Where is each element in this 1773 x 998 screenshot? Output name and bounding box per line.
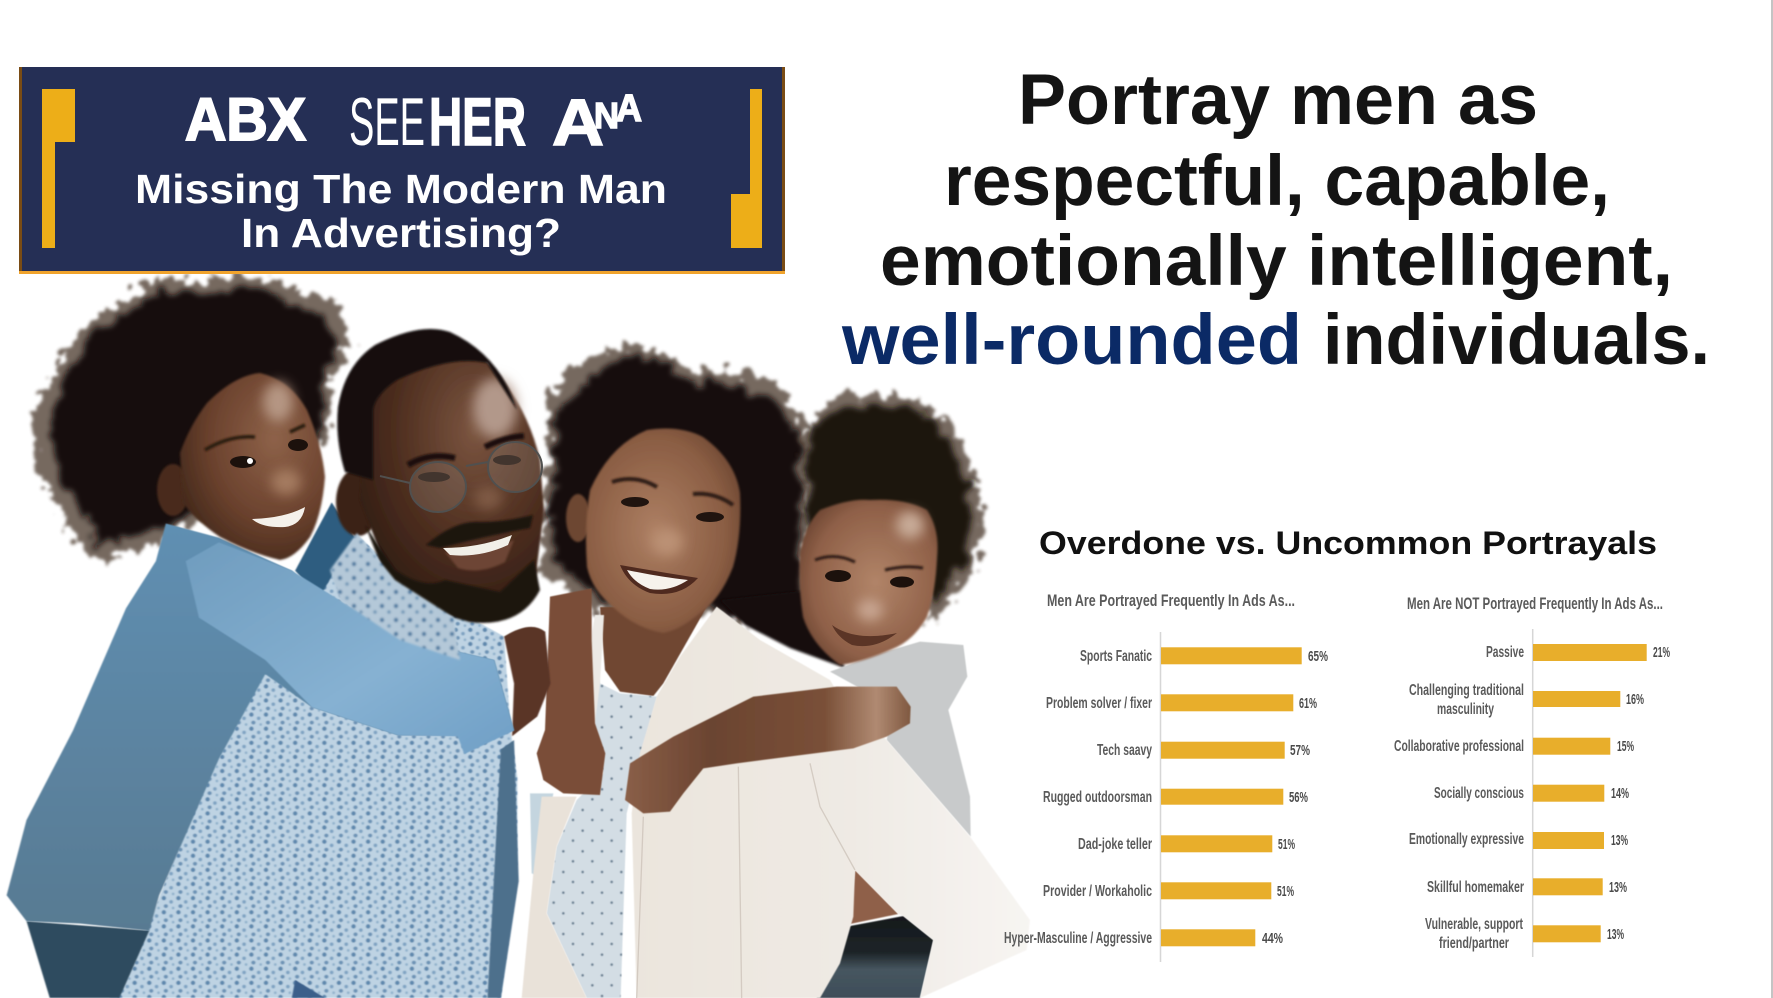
row: Hyper-Masculine: 44% bbox=[1262, 930, 1283, 947]
eyes bbox=[230, 456, 256, 468]
logo: ABX: ABX bbox=[185, 86, 306, 153]
row: Emotionally expressive: Emotionally expressive bbox=[1409, 831, 1524, 848]
eyes bbox=[418, 472, 450, 482]
row: Dad-joke teller bbox=[1078, 835, 1295, 853]
bar chart: frequently portrayed bbox=[1004, 591, 1328, 962]
beard bbox=[365, 525, 540, 623]
bar chart: not frequently portrayed bbox=[1394, 594, 1670, 957]
woman's neck bbox=[600, 607, 707, 696]
row: Challenging traditional masculinity: Challenging traditional bbox=[1409, 682, 1524, 699]
logo: ANA bbox=[552, 85, 642, 159]
row: Socially conscious: 14% bbox=[1611, 785, 1629, 802]
girl's face bbox=[157, 373, 325, 560]
dark area behind boy's neck bbox=[720, 590, 845, 668]
right bracket bbox=[731, 89, 762, 248]
brows bbox=[408, 436, 524, 465]
man's hand on child's arm bbox=[504, 627, 551, 736]
row: Hyper-Masculine: Hyper-Masculine / Aggressive bbox=[1004, 930, 1152, 947]
headline: individuals. bbox=[1323, 301, 1710, 380]
woman's hair bbox=[540, 346, 807, 640]
row: Provider bbox=[1043, 882, 1294, 900]
banner heading line 2: In Advertising? bbox=[241, 210, 561, 256]
row: Dad-joke teller: 51% bbox=[1278, 836, 1295, 853]
nose highlight bbox=[271, 469, 301, 495]
row: Tech saavy bbox=[1097, 742, 1310, 759]
row: Challenging traditional masculinity bbox=[1409, 682, 1644, 718]
eyes bbox=[825, 570, 851, 582]
teeth bbox=[443, 535, 512, 556]
headline: emotionally intelligent, bbox=[880, 222, 1673, 301]
eyes bbox=[621, 497, 649, 507]
row: Problem solver: Problem solver / fixer bbox=[1046, 695, 1152, 712]
row: Dad-joke teller: Dad-joke teller bbox=[1078, 836, 1152, 853]
row: Rugged outdoorsman: 56% bbox=[1289, 789, 1308, 806]
left bracket bbox=[42, 89, 75, 248]
boy's grey shirt bbox=[830, 642, 971, 837]
forehead highlight bbox=[263, 382, 293, 422]
row: Skillful homemaker: 13% bbox=[1609, 879, 1627, 896]
girl's arm sleeve bbox=[186, 542, 514, 754]
man's shirt collar bbox=[330, 533, 460, 660]
row: Vulnerable bbox=[1425, 916, 1624, 952]
white collar strip bbox=[591, 615, 604, 730]
row: Passive: Passive bbox=[1486, 644, 1524, 661]
row: Collaborative professional: Collaborative professional bbox=[1394, 738, 1524, 755]
boy's waist skin bbox=[850, 870, 898, 924]
row: Rugged outdoorsman bbox=[1043, 789, 1308, 806]
hair bbox=[337, 329, 517, 480]
boy's jeans bbox=[817, 916, 933, 998]
forehead highlight bbox=[473, 378, 517, 438]
headline bbox=[841, 61, 1710, 380]
woman's lower body and boy's arm bbox=[522, 588, 1030, 998]
face bbox=[360, 350, 544, 621]
row: Vulnerable: friend/partner bbox=[1439, 935, 1509, 952]
banner: title on navy bbox=[19, 67, 785, 274]
banner bottom edge bbox=[19, 271, 785, 274]
row: Tech saavy: Tech saavy bbox=[1097, 742, 1152, 759]
logo: ANA: A bbox=[616, 88, 642, 130]
girl's hair bbox=[30, 277, 353, 563]
lower lip bbox=[445, 540, 514, 570]
woman's arm and fist bbox=[537, 588, 605, 795]
moustache bbox=[426, 515, 533, 548]
nose highlight bbox=[857, 599, 883, 621]
row: Problem solver: 61% bbox=[1299, 695, 1317, 712]
headline: respectful, capable, bbox=[944, 142, 1610, 221]
headline: Portray men as bbox=[1018, 61, 1538, 140]
girl's jeans bbox=[27, 921, 149, 998]
girl's denim shirt body bbox=[7, 524, 514, 931]
brows bbox=[205, 425, 305, 450]
man's head bbox=[336, 329, 544, 623]
face shape bbox=[799, 500, 938, 665]
row: Sports Fanatic bbox=[1080, 647, 1328, 665]
boy's hair bbox=[802, 393, 982, 622]
brows bbox=[612, 479, 733, 505]
cardigan left drape bbox=[522, 797, 587, 998]
row: Sports Fanatic: 65% bbox=[1308, 648, 1328, 665]
right edge rule bbox=[1771, 0, 1773, 998]
woman's face bbox=[566, 429, 740, 633]
brows bbox=[815, 556, 923, 570]
forehead highlight bbox=[896, 511, 924, 539]
boy's arm and fist bbox=[625, 687, 911, 813]
smile bbox=[832, 625, 897, 646]
girl's denim collar behind neck bbox=[295, 502, 355, 599]
face shape bbox=[586, 429, 740, 633]
row: Sports Fanatic: Sports Fanatic bbox=[1080, 648, 1152, 665]
row: Rugged outdoorsman: Rugged outdoorsman bbox=[1043, 789, 1152, 806]
row: Challenging traditional masculinity: 16% bbox=[1626, 691, 1644, 708]
row: Socially conscious: Socially conscious bbox=[1434, 785, 1524, 802]
teeth bbox=[627, 570, 688, 590]
logo: ANA: N bbox=[594, 95, 619, 136]
logo: SeeHer: SEE bbox=[349, 84, 425, 160]
smile bbox=[252, 507, 305, 527]
row: Provider: Provider / Workaholic bbox=[1043, 883, 1152, 900]
nose bbox=[474, 486, 502, 510]
photo: smiling family of four bbox=[7, 277, 1030, 998]
mouth bbox=[620, 565, 698, 594]
cardigan seams bbox=[637, 763, 855, 998]
row: Tech saavy: 57% bbox=[1290, 742, 1310, 759]
row: Collaborative professional: 15% bbox=[1617, 738, 1634, 755]
face shape bbox=[180, 373, 325, 560]
man's jeans sliver bbox=[292, 980, 325, 998]
boy's face bbox=[799, 500, 938, 665]
headline: well-rounded bbox=[841, 301, 1302, 380]
chart section heading: Overdone vs. Uncommon Portrayals bbox=[1039, 525, 1657, 561]
row: Provider: 51% bbox=[1277, 883, 1294, 900]
ear bbox=[336, 468, 380, 536]
ear bbox=[157, 464, 189, 516]
ear bbox=[566, 494, 590, 542]
banner heading line 1: Missing The Modern Man bbox=[135, 166, 667, 212]
row: Challenging traditional masculinity: masculinity bbox=[1437, 701, 1494, 718]
row: Skillful homemaker: Skillful homemaker bbox=[1427, 879, 1524, 896]
outer blue-white lining bbox=[530, 793, 553, 877]
row: Vulnerable: Vulnerable, support bbox=[1425, 916, 1523, 933]
row: Passive bbox=[1486, 644, 1670, 661]
row: Problem solver bbox=[1046, 694, 1317, 712]
logo: ANA: A bbox=[552, 85, 604, 159]
banner background bbox=[19, 67, 785, 273]
glasses bbox=[380, 442, 542, 512]
logo: SeeHer: HER bbox=[429, 84, 526, 160]
row: Passive: 21% bbox=[1653, 644, 1670, 661]
man's shirt dark edge bbox=[488, 740, 519, 998]
man's dotted shirt bbox=[109, 533, 517, 998]
dotted top bbox=[547, 640, 657, 998]
nose highlight bbox=[651, 528, 683, 556]
cardigan main bbox=[632, 607, 1030, 998]
row: Vulnerable: 13% bbox=[1607, 926, 1624, 943]
chart subtitle: Men Are Portrayed Frequently In Ads As... bbox=[1047, 591, 1295, 610]
banner side edges bbox=[19, 67, 785, 273]
eye glint bbox=[247, 458, 253, 464]
row: Emotionally expressive: 13% bbox=[1611, 832, 1628, 849]
